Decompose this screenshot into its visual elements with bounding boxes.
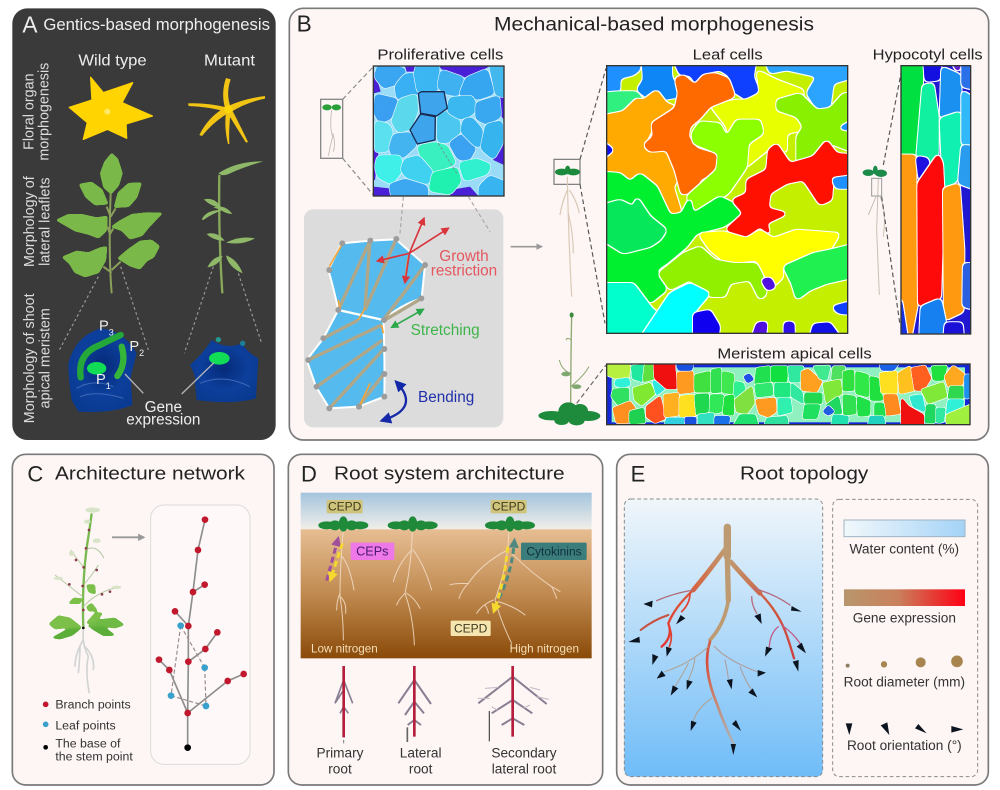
legend box bbox=[833, 499, 978, 777]
water content scale bbox=[844, 520, 965, 556]
mechanics labels: Bending bbox=[418, 389, 474, 406]
growth restriction arrows bbox=[377, 218, 448, 283]
wild type flower bbox=[69, 77, 152, 139]
legend: Leaf points bbox=[55, 718, 116, 732]
wild type shoot apical meristem bbox=[68, 328, 137, 412]
root orientation scale bbox=[846, 722, 963, 753]
primordia labels bbox=[96, 319, 144, 391]
leaf cell map bbox=[606, 65, 848, 334]
root systems bbox=[337, 530, 560, 645]
leaf cells, hypocotyl and meristem maps bbox=[597, 47, 983, 428]
roots bbox=[641, 527, 800, 743]
mutant shoot apical meristem bbox=[190, 337, 258, 402]
root diameter scale bbox=[844, 655, 965, 690]
panel B: mechanical-based morphogenesis bbox=[289, 8, 989, 440]
plant illustration bbox=[48, 507, 125, 693]
row labels: lateral leaflets bbox=[37, 177, 53, 266]
scene labels: CEPs bbox=[356, 545, 389, 559]
scene labels: Low nitrogen bbox=[311, 642, 378, 655]
panel C heading: C bbox=[27, 461, 43, 486]
panel A heading bbox=[22, 11, 270, 37]
panel B heading bbox=[297, 11, 814, 37]
seedling with leaf inset bbox=[554, 68, 606, 323]
scene labels: Cytokinins bbox=[526, 545, 582, 559]
gene expression scale bbox=[844, 589, 965, 626]
scene labels: High nitrogen bbox=[510, 642, 579, 655]
root type: primary root bbox=[316, 666, 364, 777]
stretching arrow bbox=[392, 309, 423, 327]
wild type compound leaf bbox=[55, 153, 163, 293]
primordia labels: 3 bbox=[109, 328, 114, 338]
row labels: morphogenesis bbox=[36, 63, 52, 161]
legend bbox=[43, 698, 133, 763]
row labels: Morphology of shoot bbox=[22, 293, 38, 423]
primordia labels: P bbox=[99, 319, 109, 335]
signal arrows bbox=[327, 540, 514, 610]
root type: secondary lateral root bbox=[478, 666, 557, 777]
mutant leaf bbox=[202, 161, 263, 293]
zoom guide lines bbox=[59, 267, 262, 353]
hypocotyl cells label: Hypocotyl cells bbox=[873, 47, 983, 63]
primordia labels: 2 bbox=[139, 348, 144, 358]
scene labels: CEPD bbox=[328, 500, 362, 514]
mechanics labels: restriction bbox=[431, 262, 497, 279]
root type: lateral root: Lateral bbox=[400, 746, 442, 761]
panel D heading bbox=[301, 461, 565, 486]
gene expression callout: Gene bbox=[145, 399, 182, 416]
root type: lateral root: root bbox=[409, 762, 433, 777]
bending arrow bbox=[382, 382, 406, 421]
root orientation scale: Root orientation (°) bbox=[847, 738, 962, 753]
arrow to whole plant bbox=[511, 244, 542, 249]
panel E heading bbox=[631, 461, 869, 486]
meristem apical cell map bbox=[607, 362, 973, 428]
scene labels: CEPD bbox=[454, 622, 488, 636]
column headings: wild type and mutant bbox=[78, 53, 256, 70]
panel D: root system architecture bbox=[288, 454, 603, 785]
proliferative cells label: Proliferative cells bbox=[377, 47, 503, 63]
panel E heading: Root topology bbox=[740, 462, 869, 483]
legend: Branch points bbox=[55, 698, 131, 712]
leaf cells label: Leaf cells bbox=[693, 47, 763, 63]
root type: secondary lateral root: lateral root bbox=[492, 762, 556, 777]
gene expression callout: expression bbox=[126, 412, 200, 429]
mature rosette plant bbox=[538, 312, 606, 425]
column headings: wild type and mutant: Wild type bbox=[78, 53, 147, 70]
legend: the stem point bbox=[55, 749, 133, 763]
vertices bbox=[305, 236, 428, 411]
orientation arrowheads bbox=[628, 601, 806, 755]
panel B heading: B bbox=[297, 11, 312, 37]
panel E: root topology bbox=[617, 454, 988, 785]
legend: The base of bbox=[55, 737, 121, 751]
panel A heading: Gentics-based morphogenesis bbox=[43, 15, 270, 34]
water content scale: Water content (%) bbox=[850, 541, 959, 556]
primordia labels: 1 bbox=[106, 381, 111, 391]
primordia labels: P bbox=[129, 339, 139, 355]
row labels: Morphology of bbox=[22, 176, 38, 267]
primordia labels: P bbox=[96, 372, 106, 388]
water gradient root map bbox=[624, 499, 823, 777]
soil and sky scene bbox=[301, 493, 592, 658]
mutant flower bbox=[188, 78, 265, 144]
panel E heading: E bbox=[631, 461, 645, 486]
panel C: architecture network bbox=[12, 454, 274, 785]
row labels: apical meristem bbox=[37, 308, 53, 408]
microfibril bands bbox=[308, 239, 425, 408]
hypocotyl cell map bbox=[900, 65, 972, 335]
hypocotyl seedling bbox=[863, 70, 902, 325]
row labels bbox=[21, 63, 53, 423]
scene labels: CEPD bbox=[492, 500, 526, 514]
panel C heading bbox=[27, 461, 246, 486]
panel A heading: A bbox=[22, 11, 38, 37]
network graph bbox=[151, 505, 250, 764]
root type: primary root: root bbox=[328, 762, 352, 777]
panel A: genetics-based morphogenesis bbox=[12, 8, 276, 440]
scene labels bbox=[311, 500, 587, 655]
panel D heading: Root system architecture bbox=[334, 462, 565, 483]
mechanics labels: Stretching bbox=[411, 322, 480, 339]
cell mechanics diagram bbox=[304, 197, 503, 427]
row labels: Floral organ bbox=[21, 73, 37, 150]
panel D heading: D bbox=[301, 461, 317, 486]
gene expression scale: Gene expression bbox=[853, 611, 956, 626]
column headings: wild type and mutant: Mutant bbox=[204, 53, 256, 70]
mechanics labels bbox=[411, 248, 497, 406]
root type: lateral root bbox=[398, 666, 442, 777]
seedling thumbnail bbox=[321, 67, 373, 195]
panel B heading: Mechanical-based morphogenesis bbox=[494, 15, 814, 36]
meristem apical cells label: Meristem apical cells bbox=[717, 346, 872, 362]
panel C heading: Architecture network bbox=[55, 462, 246, 483]
root diameter scale: Root diameter (mm) bbox=[844, 675, 965, 690]
cell shape bbox=[307, 239, 425, 408]
arrow to network bbox=[112, 535, 144, 540]
gene expression callout bbox=[125, 363, 214, 429]
mechanics labels: Growth bbox=[439, 248, 489, 265]
proliferative cell map bbox=[373, 62, 510, 200]
root type: secondary lateral root: Secondary bbox=[491, 746, 557, 761]
rosettes bbox=[318, 516, 535, 532]
root type: primary root: Primary bbox=[316, 746, 364, 761]
